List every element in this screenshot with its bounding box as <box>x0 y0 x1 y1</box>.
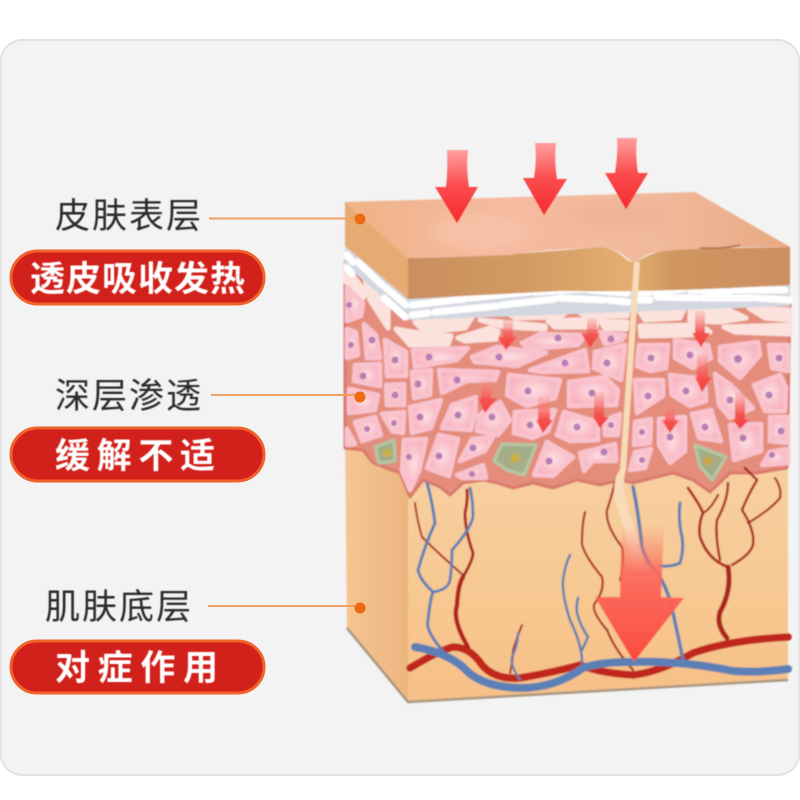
label group: deep layer <box>11 377 366 481</box>
label group: base layer <box>11 588 366 693</box>
pill: 缓解不适 <box>11 428 264 481</box>
dermis layer <box>345 430 788 702</box>
vessels: red arteries <box>410 468 788 678</box>
pill: 缓解不适: 缓解不适 <box>55 437 215 476</box>
white membrane band <box>345 245 790 320</box>
hair shaft <box>614 262 646 570</box>
green damaged cells <box>375 440 726 480</box>
pill: 透皮吸收发热: 透皮吸收发热 <box>30 260 245 299</box>
label text: 深层渗透: 深层渗透 <box>55 377 203 416</box>
leader line and dot <box>211 392 366 402</box>
arrow 3 <box>605 138 648 209</box>
skin cross-section block <box>345 192 790 702</box>
leader line and dot <box>209 214 366 224</box>
label group: surface layer <box>11 197 366 304</box>
pill: 对症作用 <box>11 641 264 693</box>
pink cells <box>347 287 788 490</box>
large top arrows <box>435 138 648 223</box>
skin surface slab <box>345 192 790 299</box>
label text: 肌肤底层: 肌肤底层 <box>45 588 193 627</box>
arrow 1 <box>435 150 478 223</box>
small red arrows in cells <box>478 311 749 433</box>
flat upper cells <box>345 265 790 345</box>
leader line and dot <box>208 602 366 614</box>
vessels: blue veins <box>415 483 788 688</box>
cell nuclei <box>346 302 784 477</box>
arrow 2 <box>523 143 567 215</box>
label text: 皮肤表层: 皮肤表层 <box>55 197 203 236</box>
epidermis pink cell layer <box>345 262 790 497</box>
pill: 透皮吸收发热 <box>11 251 264 304</box>
pill: 对症作用: 对症作用 <box>55 649 218 688</box>
big downward arrow <box>595 525 684 662</box>
